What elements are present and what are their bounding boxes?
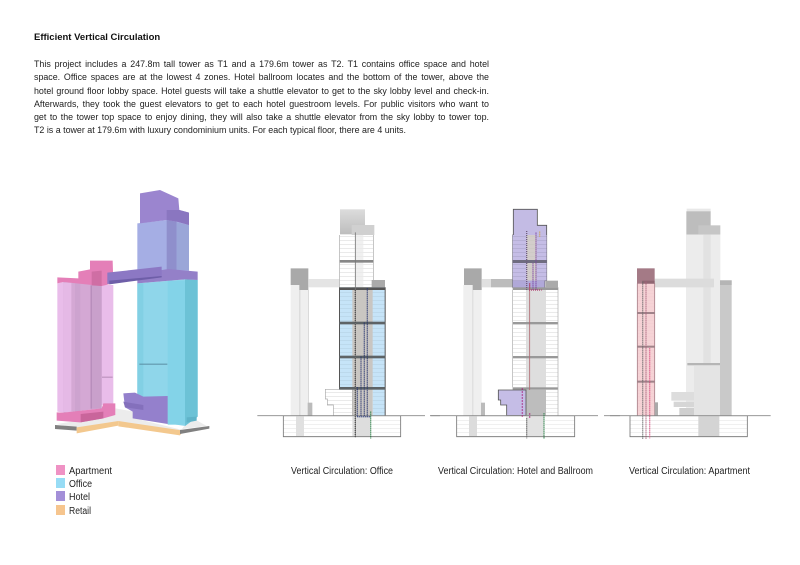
basement (610, 416, 771, 437)
hotel podium (123, 393, 168, 424)
ghost apartment tower (291, 268, 339, 416)
caption hotel: Vertical Circulation: Hotel and Ballroom (438, 466, 593, 477)
sky lobby band (137, 269, 198, 283)
section captions (291, 466, 750, 477)
description text block: hotel ground floor lobby space. Hotel guests will take a shuttle elevator to get to the sky lobby level and check-in. (34, 86, 489, 96)
apartment shaft (637, 268, 658, 416)
legend: hotel: Hotel (69, 492, 90, 503)
apartment podium (57, 403, 115, 422)
caption apartment: Vertical Circulation: Apartment (629, 466, 750, 477)
apartment crown (57, 261, 113, 286)
title: Efficient Vertical Circulation (34, 32, 160, 43)
sky bridge (107, 267, 162, 284)
basement (431, 416, 620, 437)
description text block (34, 59, 489, 135)
description text block: space. Office spaces are at the lowest 4 zones. Hotel ballroom locates and the bottom of the tower, above the (34, 72, 489, 82)
description text block: get to the tower top space to enjoy dining, they will also take a shuttle elevator from the sky lobby to tower top. (34, 112, 489, 122)
ghost hotel and office tower (655, 209, 732, 416)
section: vertical circulation hotel and ballroom (431, 209, 620, 439)
basement (257, 416, 440, 437)
tower top (339, 209, 385, 287)
description text block: This project includes a 247.8m tall tower as T1 and a 179.6m tower as T2. T1 contains office space and hotel (34, 59, 489, 69)
description text block: T2 is a tower at 179.6m with luxury condominium units. For each typical floor, there are 4 units. (34, 125, 406, 135)
apartment tower T2 (57, 261, 115, 422)
hotel crown (140, 190, 189, 225)
hotel upper volume (137, 220, 189, 272)
section: vertical circulation office (257, 209, 440, 438)
circulation lines (355, 232, 371, 438)
caption office: Vertical Circulation: Office (291, 466, 393, 477)
section: vertical circulation apartment (610, 209, 771, 439)
lower tower shaft (513, 290, 558, 416)
hotel tower top (513, 209, 558, 290)
ghost apartment tower (463, 268, 513, 416)
office and hotel tower T1 (107, 190, 198, 426)
office zones (325, 287, 386, 416)
3D tower massing (55, 190, 209, 435)
base slab (55, 408, 209, 435)
circulation lines (522, 231, 544, 439)
legend (56, 465, 112, 517)
legend: retail: Retail (69, 506, 91, 517)
ballroom (498, 390, 526, 416)
office volume (137, 279, 198, 426)
legend: apartment: Apartment (69, 466, 112, 477)
circulation lines (643, 282, 650, 439)
description text block: Afterwards, they took the guest elevators to get to each hotel guestroom levels. For public visitors who want to (34, 99, 489, 109)
legend: office: Office (69, 479, 92, 490)
